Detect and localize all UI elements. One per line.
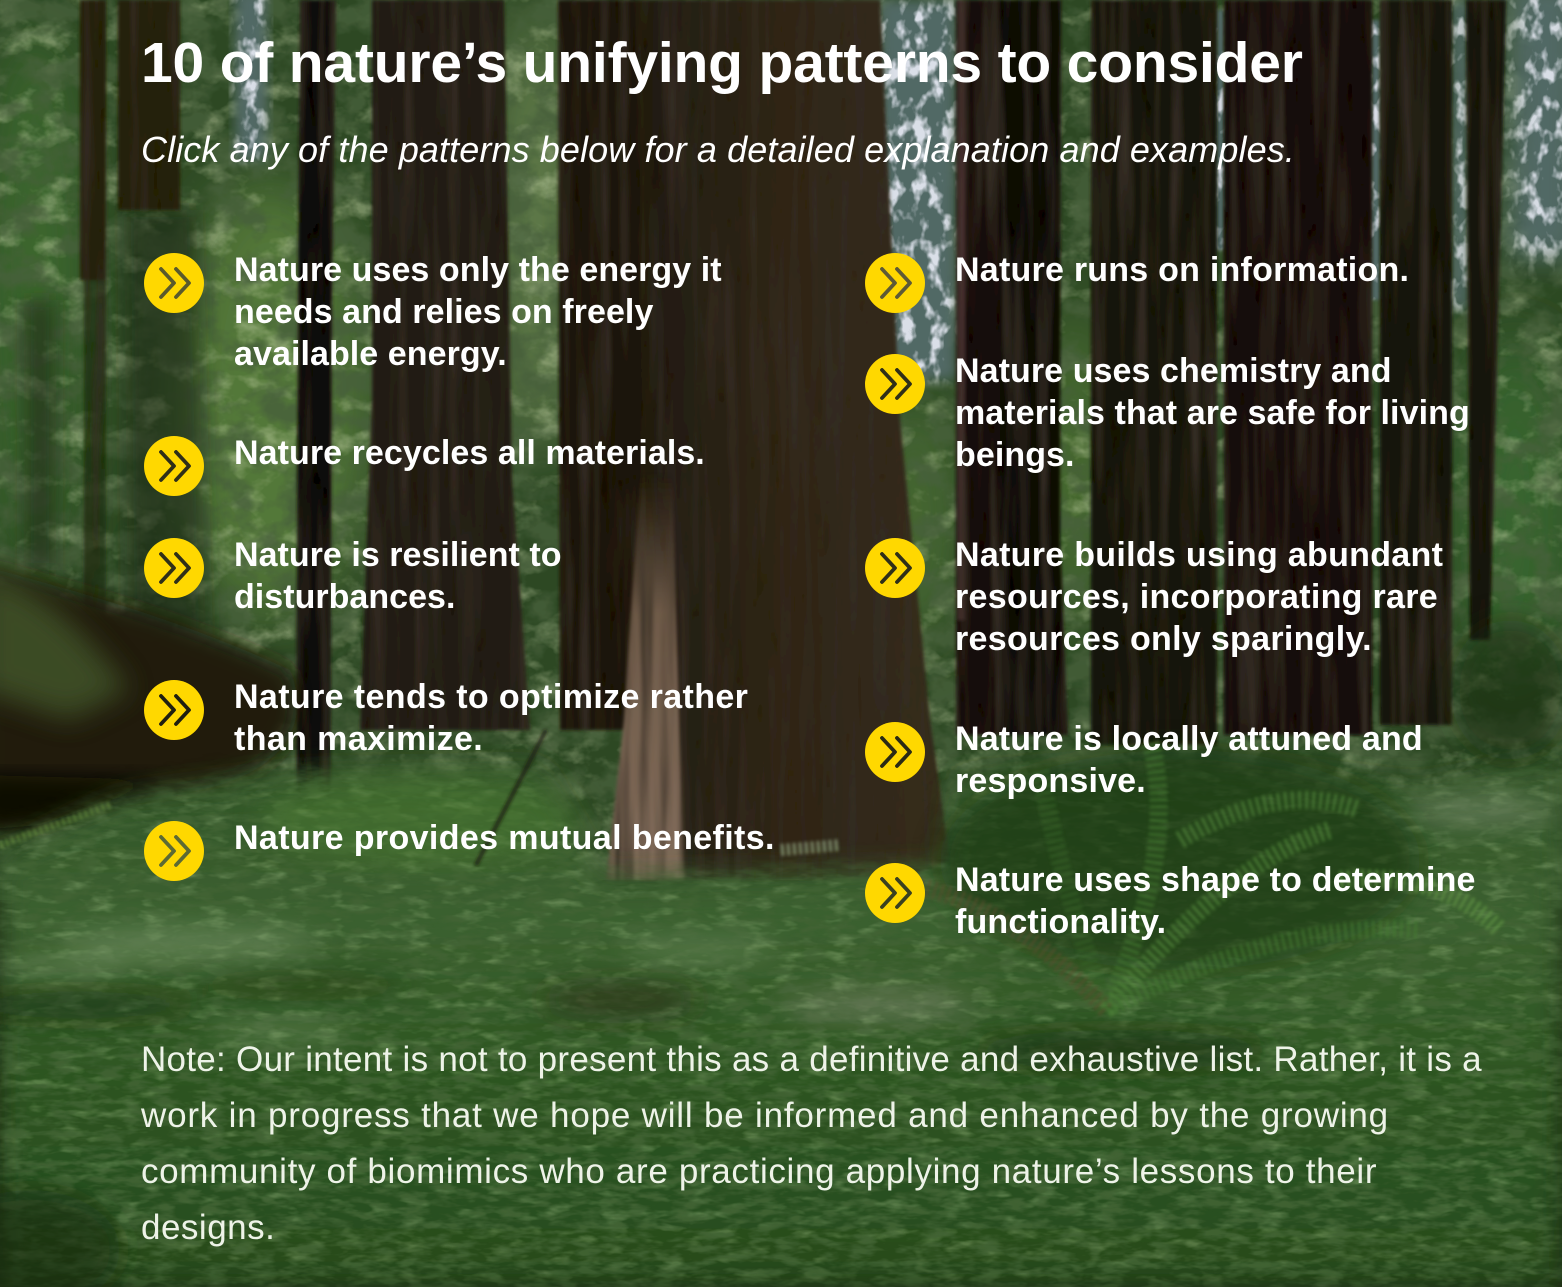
pattern 10 text xyxy=(955,861,1476,941)
tree trunks xyxy=(80,0,1506,880)
pattern 4 text: than maximize. xyxy=(234,720,483,758)
pattern 5 text: Nature provides mutual benefits. xyxy=(234,819,775,857)
icon: arrow button 5 xyxy=(144,821,204,881)
note text block: Note: Our intent is not to present this as a definitive and exhaustive list. Rather, it is a xyxy=(141,1040,1482,1079)
fern fronds and stick details xyxy=(0,730,840,865)
pattern 9 text: Nature is locally attuned and xyxy=(955,720,1423,758)
pattern 3 text xyxy=(234,536,562,616)
pattern 9 text: responsive. xyxy=(955,762,1146,800)
pattern 1 text: needs and relies on freely xyxy=(234,293,653,331)
pattern 4 text: Nature tends to optimize rather xyxy=(234,678,748,716)
pattern 1 text: Nature uses only the energy it xyxy=(234,251,722,289)
pattern 9 text xyxy=(955,720,1423,800)
icon: arrow button 7 xyxy=(865,354,925,414)
icon: arrow button 8 xyxy=(865,538,925,598)
pattern 3 text: Nature is resilient to xyxy=(234,536,562,574)
foliage texture xyxy=(0,0,1562,880)
pattern 7 text: beings. xyxy=(955,436,1075,474)
foliage light masses xyxy=(0,0,1562,710)
icon: arrow button 1 xyxy=(144,253,204,313)
subtitle: Click any of the patterns below for a detailed explanation and examples. xyxy=(141,129,1295,170)
icon: arrow button 2 xyxy=(144,436,204,496)
floor shadows xyxy=(0,620,1562,1287)
pattern 8 text xyxy=(955,536,1443,658)
title: 10 of nature’s unifying patterns to consider xyxy=(141,31,1303,95)
pattern 7 text: Nature uses chemistry and xyxy=(955,352,1392,390)
note text block: work in progress that we hope will be informed and enhanced by the growing xyxy=(141,1096,1389,1135)
pattern 1 text: available energy. xyxy=(234,335,507,373)
note text block: community of biomimics who are practicing applying nature’s lessons to their xyxy=(141,1152,1377,1191)
pattern 1 text xyxy=(234,251,722,373)
pattern 2 text: Nature recycles all materials. xyxy=(234,434,705,472)
pattern 3 text: disturbances. xyxy=(234,578,455,616)
glowing bark strip xyxy=(606,470,684,880)
ferns xyxy=(880,740,1500,1010)
pattern 10 text: functionality. xyxy=(955,903,1166,941)
icon: arrow button 4 xyxy=(144,680,204,740)
icon: arrow button 6 xyxy=(865,253,925,313)
pattern 6 text: Nature runs on information. xyxy=(955,251,1409,289)
soft background trees xyxy=(24,210,206,640)
sky gaps xyxy=(228,0,1562,390)
icon: arrow button 9 xyxy=(865,722,925,782)
icon: arrow button 10 xyxy=(865,863,925,923)
note text block: designs. xyxy=(141,1208,275,1247)
forest floor xyxy=(0,760,1562,1287)
mossy log xyxy=(0,565,297,830)
canopy base xyxy=(0,0,1562,900)
pattern 4 text xyxy=(234,678,748,758)
light patches xyxy=(0,775,1560,1042)
pattern 7 text xyxy=(955,352,1470,474)
pattern 7 text: materials that are safe for living xyxy=(955,394,1470,432)
pattern 10 text: Nature uses shape to determine xyxy=(955,861,1476,899)
pattern 8 text: resources, incorporating rare xyxy=(955,578,1438,616)
note text block xyxy=(141,1040,1482,1247)
icon: arrow button 3 xyxy=(144,538,204,598)
floor texture xyxy=(0,740,1562,1287)
pattern 8 text: resources only sparingly. xyxy=(955,620,1372,658)
pattern 8 text: Nature builds using abundant xyxy=(955,536,1443,574)
